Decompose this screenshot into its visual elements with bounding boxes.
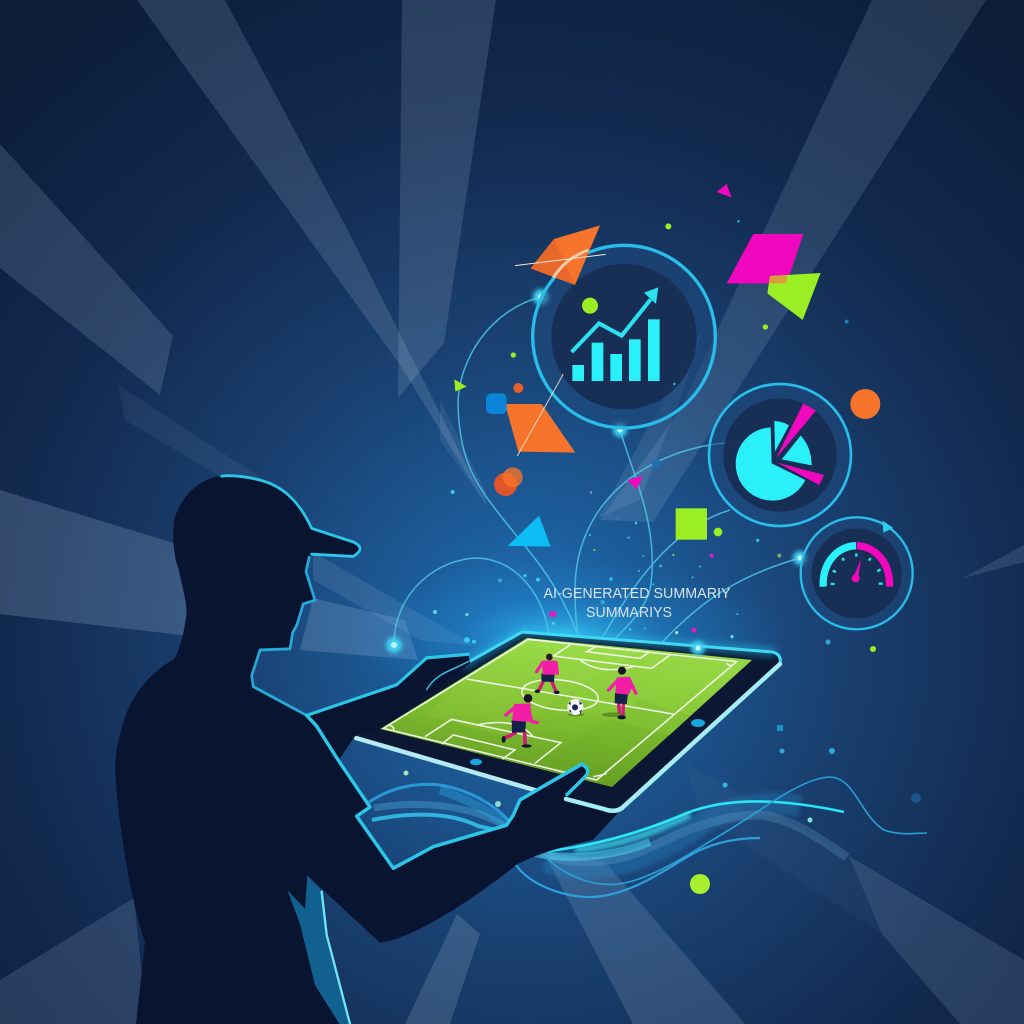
sleeve highlight bbox=[287, 875, 350, 1024]
icon: green kite bbox=[767, 273, 821, 320]
silhouette cyan outline bbox=[222, 476, 588, 1024]
tablet glowing edge bbox=[356, 632, 780, 808]
players and ball bbox=[502, 654, 636, 748]
icon: magenta parallelogram bbox=[727, 234, 803, 283]
icon: green square bbox=[676, 508, 707, 540]
tablet bbox=[355, 632, 781, 811]
icon: orange quad bbox=[505, 374, 575, 456]
text: AI summary caption: SUMMARIYS bbox=[586, 604, 672, 621]
silhouette of person holding tablet bbox=[115, 476, 618, 1024]
chart circle bbox=[533, 245, 715, 428]
lower scattered particles bbox=[404, 610, 921, 894]
flowing data waves bbox=[369, 777, 927, 897]
gauge arrowhead bbox=[883, 521, 893, 533]
glowing edge node bbox=[691, 641, 705, 655]
right wave bands bbox=[516, 777, 927, 897]
icon: large orange dot bbox=[850, 389, 880, 419]
tablet body bbox=[355, 632, 781, 811]
trend arrow bbox=[572, 287, 658, 352]
football bbox=[567, 699, 584, 716]
icon: green dot bbox=[714, 528, 722, 536]
text: AI summary caption bbox=[544, 585, 730, 621]
green dot bbox=[582, 298, 598, 314]
connection curves bbox=[394, 297, 800, 650]
gauge arc bbox=[823, 546, 889, 587]
glowing curve nodes bbox=[386, 289, 807, 653]
floating shapes and analytics icons bbox=[451, 184, 913, 651]
gauge ticks bbox=[831, 553, 883, 584]
tablet lower edge over hand bbox=[566, 799, 622, 811]
icon: blue rounded square bbox=[486, 393, 507, 414]
player 1 bbox=[535, 654, 560, 694]
text: AI summary caption: AI-GENERATED SUMMARIY bbox=[544, 585, 730, 602]
football pitch bbox=[380, 638, 752, 787]
scattered particles bbox=[451, 220, 875, 651]
body shape bbox=[115, 476, 618, 1024]
player 3 bbox=[502, 694, 537, 748]
pie highlight wedges bbox=[776, 403, 824, 485]
tablet buttons bbox=[470, 719, 705, 765]
icon: green triangle bbox=[454, 379, 467, 392]
gauge needle bbox=[852, 559, 861, 582]
icon: magenta triangle bbox=[627, 476, 643, 489]
icon: small orange dot bbox=[513, 383, 523, 393]
pie slices bbox=[736, 421, 812, 501]
left wave bands bbox=[369, 784, 510, 832]
icon: small magenta triangle bbox=[717, 184, 732, 198]
player 2 bbox=[601, 667, 636, 719]
icon: orange kite bbox=[515, 225, 606, 285]
gauge circle bbox=[801, 517, 913, 629]
icon: blue triangle bbox=[508, 516, 551, 547]
pitch lines bbox=[383, 639, 737, 780]
icon: overlapping orange circles bbox=[494, 467, 523, 496]
tablet light glow bbox=[345, 560, 785, 710]
pie chart circle bbox=[709, 384, 851, 526]
bar chart bbox=[572, 319, 660, 381]
